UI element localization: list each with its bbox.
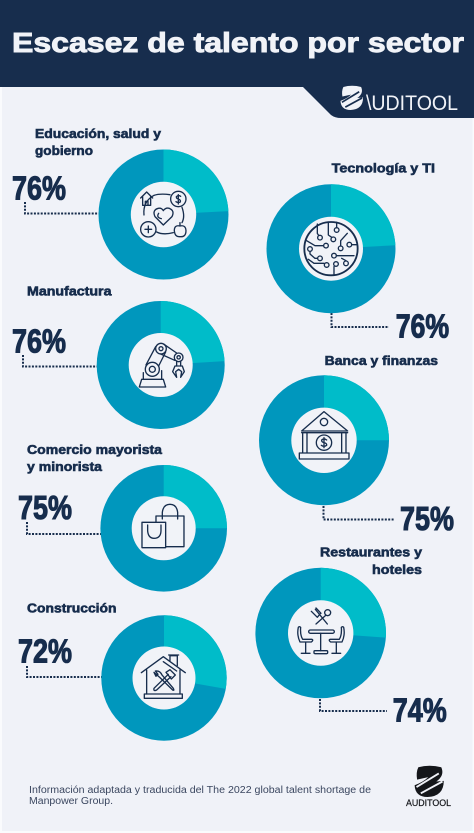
sector label: hoteles (372, 562, 422, 577)
sector label: Banca y finanzas (325, 353, 438, 368)
sector label (320, 545, 423, 577)
panel: Construcción (18, 601, 227, 741)
panel: Educación, salud y gobierno (12, 126, 228, 280)
sector label: Tecnología y TI (332, 161, 435, 176)
connector (23, 355, 98, 366)
percentage: 75% (400, 500, 454, 537)
panel: Restaurantes y hoteles (255, 545, 447, 729)
sector label (27, 442, 163, 474)
sector label: Comercio mayorista (27, 442, 163, 457)
connector (324, 506, 394, 520)
panel: Banca y finanzas (259, 353, 454, 537)
donut chart (255, 568, 386, 698)
sector label: Manufactura (27, 284, 112, 299)
sector label: Construcción (27, 601, 117, 616)
footer logo: AUDITOOL (406, 798, 451, 809)
header logo (340, 86, 458, 115)
percentage: 75% (18, 489, 72, 526)
donut chart (259, 375, 389, 505)
percentage: 74% (393, 692, 447, 729)
connector (320, 699, 387, 711)
icon: robot arm (139, 343, 184, 387)
connector (25, 202, 100, 214)
footer logo (406, 766, 451, 809)
sector label: Restaurantes y (320, 545, 423, 560)
percentage: 76% (12, 169, 66, 206)
panel: Tecnología y TI (266, 161, 449, 344)
icon: house with tools (141, 655, 185, 698)
sector label (35, 126, 162, 158)
panel: Comercio mayorista y minorista (18, 442, 227, 592)
percentage: 76% (396, 307, 449, 344)
icon: restaurant table (298, 608, 344, 654)
icon: circuit (304, 222, 358, 275)
icon: shopping bags (142, 504, 184, 548)
footer source note: Manpower Group. (29, 796, 113, 807)
connector (27, 666, 103, 677)
percentage: 76% (12, 323, 66, 360)
donut chart (98, 150, 228, 280)
donut chart (97, 301, 225, 429)
header logo: \UDITOOL (366, 92, 458, 115)
sector label: Educación, salud y (35, 126, 162, 141)
header banner (0, 0, 474, 118)
icon: community care (141, 191, 186, 237)
icon: bank (299, 412, 349, 459)
donut chart (101, 615, 227, 741)
donut chart (100, 465, 227, 592)
panel: Manufactura (12, 284, 225, 429)
percentage: 72% (18, 633, 72, 670)
sector label: gobierno (35, 143, 93, 158)
sector label: y minorista (27, 459, 103, 474)
title: Escasez de talento por sector (12, 27, 464, 58)
connector (27, 522, 103, 534)
donut chart (266, 184, 396, 313)
footer source note (29, 785, 371, 807)
connector (332, 313, 389, 327)
footer source note: Información adaptada y traducida del The 2022 global talent shortage de (29, 785, 371, 796)
